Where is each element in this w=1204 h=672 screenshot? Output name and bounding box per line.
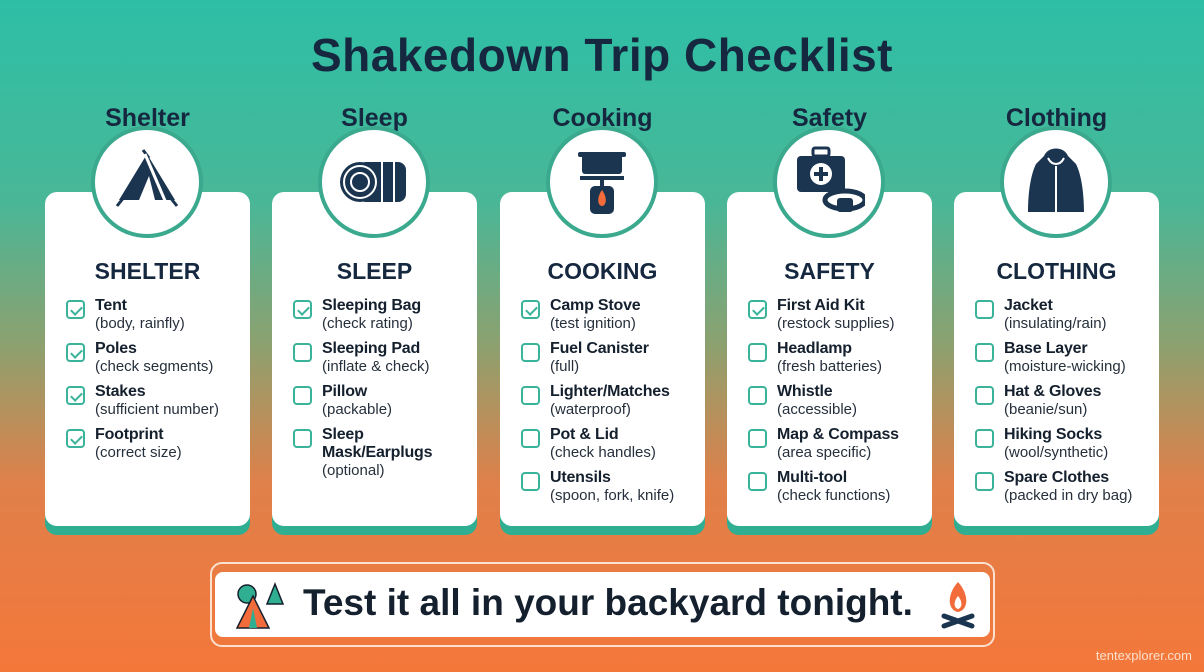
panel: cooking: (full) [550,358,579,375]
panel: sleep: Sleeping Pad [322,340,420,357]
callout banner: Test it all in your backyard tonight. [303,582,913,623]
heading: Shelter: Shelter [105,104,190,132]
title: Shakedown Trip Checklist [311,29,893,81]
panel: shelter: Stakes [95,383,145,400]
panel: clothing: (beanie/sun) [1004,401,1087,418]
panel: shelter: (check segments) [95,358,213,375]
icon: jacket [1000,126,1112,238]
panel: cooking: Lighter/Matches [550,383,670,400]
callout banner [210,562,995,647]
panel: sleep: Mask/Earplugs [322,444,432,461]
panel: sleep: Sleeping Bag [322,297,421,314]
heading: Sleep: Sleep [341,104,408,132]
icon: campfire [942,582,974,628]
icon: sleeping bag [318,126,430,238]
panel: shelter: (correct size) [95,444,182,461]
panel: sleep: SLEEP [337,258,412,284]
panel: clothing [954,192,1159,535]
panel: safety [727,192,932,535]
panel: sleep: (check rating) [322,315,413,332]
panel: shelter: (body, rainfly) [95,315,185,332]
panel: clothing: Spare Clothes [1004,469,1109,486]
panel: clothing: Hat & Gloves [1004,383,1101,400]
icon: first aid kit and headlamp [773,126,885,238]
panel: cooking: (test ignition) [550,315,636,332]
panel: safety: First Aid Kit [777,297,864,314]
panel: clothing: Base Layer [1004,340,1087,357]
panel: sleep: (optional) [322,462,385,479]
heading: Cooking: Cooking [552,104,652,132]
panel: cooking: Utensils [550,469,611,486]
panel: sleep: Pillow [322,383,367,400]
panel: sleep: (inflate & check) [322,358,430,375]
panel: shelter: Footprint [95,426,163,443]
panel: safety: (area specific) [777,444,871,461]
icon: camp stove [546,126,658,238]
panel: safety: Whistle [777,383,832,400]
panel: clothing: CLOTHING [996,258,1117,284]
panel: cooking: (spoon, fork, knife) [550,487,674,504]
heading: Clothing: Clothing [1006,104,1107,132]
panel: safety: Headlamp [777,340,852,357]
footer credit: tentexplorer.com [1096,648,1192,663]
panel: shelter: Tent [95,297,127,314]
panel: cooking: (waterproof) [550,401,631,418]
panel: cooking: Pot & Lid [550,426,618,443]
panel: safety: SAFETY [784,258,875,284]
panel: clothing: Jacket [1004,297,1053,314]
panel: safety: (fresh batteries) [777,358,882,375]
panel: sleep: (packable) [322,401,392,418]
panel: safety: (restock supplies) [777,315,895,332]
panel: cooking: Camp Stove [550,297,640,314]
panel: clothing: (packed in dry bag) [1004,487,1132,504]
panel: shelter: SHELTER [95,258,200,284]
panel: safety: (check functions) [777,487,890,504]
heading: Safety: Safety [792,104,867,132]
panel: cooking [500,192,705,535]
panel: sleep: Sleep [322,426,364,443]
panel: sleep [272,192,477,535]
panel: clothing: Hiking Socks [1004,426,1102,443]
panel: safety: Multi-tool [777,469,847,486]
panel: cooking: COOKING [548,258,657,284]
icon: tent [91,126,203,238]
panel: safety: Map & Compass [777,426,899,443]
panel: cooking: (check handles) [550,444,656,461]
panel: cooking: Fuel Canister [550,340,649,357]
panel: clothing: (wool/synthetic) [1004,444,1108,461]
panel: shelter: Poles [95,340,137,357]
icon: tent with trees [236,582,284,629]
panel: clothing: (insulating/rain) [1004,315,1107,332]
panel: clothing: (moisture-wicking) [1004,358,1126,375]
panel: safety: (accessible) [777,401,857,418]
panel: shelter [45,192,250,535]
panel: shelter: (sufficient number) [95,401,219,418]
